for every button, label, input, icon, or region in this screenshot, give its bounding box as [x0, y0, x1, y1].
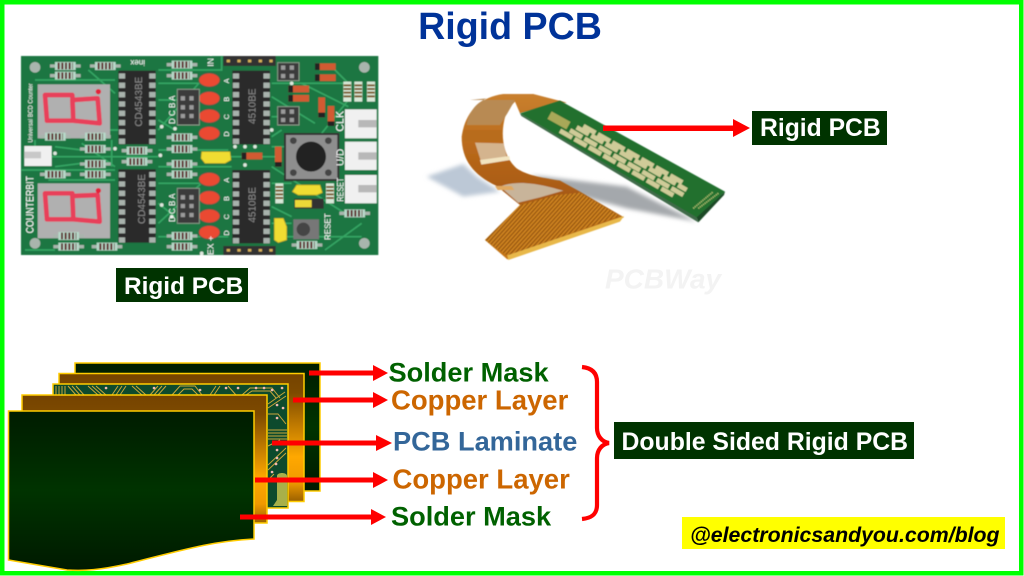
- flex ribbon: [462, 94, 624, 260]
- board silkscreen labels: A: [222, 78, 231, 83]
- label: copper layer top: Copper Layer: [391, 384, 569, 416]
- photo: flexible and rigid PCB: [427, 94, 725, 294]
- board silkscreen labels: D C B A: [168, 193, 177, 222]
- layer: front solder mask: [8, 411, 254, 570]
- layer: front copper: [22, 395, 267, 523]
- label: Double Sided Rigid PCB: Double Sided Rigid PCB: [622, 429, 908, 456]
- board silkscreen labels: B: [222, 97, 231, 102]
- board silkscreen labels: inex: [130, 58, 145, 67]
- arrow to rigid PCB label: [603, 119, 750, 137]
- push buttons: [285, 134, 338, 239]
- title: Rigid PCB: [418, 5, 602, 47]
- board silkscreen labels: D: [222, 230, 231, 236]
- board silkscreen labels: CLK: [334, 111, 346, 132]
- layer: back solder mask: [75, 363, 320, 491]
- pin headers and jumpers: [177, 56, 324, 255]
- board silkscreen labels: EX +: [205, 236, 215, 255]
- integrated circuits: CD4543BE: [134, 76, 145, 127]
- layer stack diagram: [8, 363, 320, 570]
- source credit: @electronicsandyou.com/blog: [690, 523, 1000, 547]
- label: solder mask bottom: Solder Mask: [391, 500, 552, 532]
- label: Double Sided Rigid PCB: [614, 422, 914, 459]
- mounting holes: [35, 67, 364, 243]
- arrow: bottom copper layer: [255, 472, 388, 488]
- arrow: laminate: [272, 435, 392, 451]
- arrow: top solder mask: [309, 365, 388, 381]
- arrow: bottom solder mask: [240, 509, 386, 525]
- label: solder mask top: Solder Mask: [388, 356, 550, 388]
- resistors: [40, 65, 371, 247]
- label: copper layer bottom: Copper Layer: [392, 464, 570, 494]
- board silkscreen labels: U/D: [335, 149, 346, 166]
- yellow capacitors: [201, 152, 322, 243]
- board silkscreen labels: Universal BCD Counter: [27, 83, 34, 143]
- brace: [582, 367, 609, 519]
- seven segment displays: [38, 84, 110, 238]
- green rigid section: [520, 101, 725, 222]
- red LEDs: [199, 73, 220, 239]
- white connectors: [24, 109, 377, 203]
- integrated circuits: CD4543BE: [137, 174, 148, 224]
- label: PCB laminate: PCB Laminate: [393, 426, 577, 456]
- board silkscreen labels: A: [222, 178, 231, 183]
- photo: green rigid circuit board: [21, 51, 378, 255]
- watermark: PCBWay: [605, 263, 723, 294]
- board silkscreen labels: C: [222, 113, 231, 119]
- diodes: [242, 67, 336, 167]
- board silkscreen labels: D C B A: [168, 95, 177, 124]
- integrated circuits: 4510BE: [248, 187, 259, 223]
- layer: back copper: [59, 374, 304, 502]
- label: Rigid PCB left: Rigid PCB: [124, 273, 243, 300]
- label: Rigid PCB right: Rigid PCB: [760, 115, 881, 142]
- integrated circuits: [118, 71, 270, 243]
- board silkscreen labels: COUNTERBIT: [24, 176, 36, 233]
- board silkscreen labels: RESET: [324, 213, 333, 240]
- board silkscreen labels: C: [222, 213, 231, 219]
- board silkscreen labels: IN +: [205, 51, 215, 67]
- board silkscreen labels: B: [222, 196, 231, 201]
- board silkscreen labels: D: [222, 131, 231, 137]
- board silkscreen labels: [24, 51, 346, 255]
- arrow: top copper layer: [293, 392, 388, 408]
- integrated circuits: 4510BE: [248, 88, 259, 124]
- shadow: [427, 164, 697, 222]
- board silkscreen labels: RESET: [335, 177, 345, 202]
- layer: laminate: [53, 384, 288, 508]
